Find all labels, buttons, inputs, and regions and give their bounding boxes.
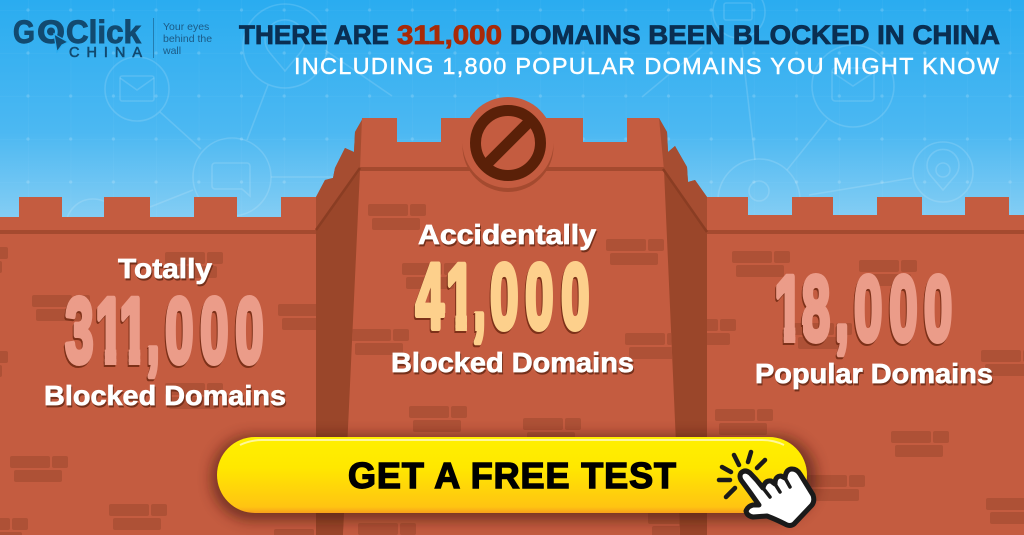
stat: popular domains: [756, 273, 994, 392]
stat: accidentally blocked: Accidentally: [418, 219, 596, 250]
network icons in the sky: [66, 0, 973, 253]
title: THERE ARE: [239, 20, 389, 50]
icon: clicking hand: [719, 452, 814, 526]
stat: popular domains: 18,000: [774, 257, 952, 360]
logo: O: [37, 14, 65, 50]
stat: total blocked: [44, 253, 286, 411]
logo: wall: [162, 45, 181, 57]
tower side faces: [316, 118, 707, 535]
stat: total blocked: Blocked Domains: [44, 380, 286, 411]
stat: total blocked: 311,000: [65, 279, 264, 382]
logo: CHINA: [69, 45, 142, 61]
logo: behind the: [163, 33, 212, 45]
tower bricks: [351, 204, 706, 535]
stop sign: [462, 97, 554, 192]
stat: accidentally blocked: Blocked Domains: [391, 347, 634, 378]
right wall: [700, 197, 1024, 535]
title: [239, 20, 1000, 50]
stat: popular domains: Popular Domains: [755, 358, 993, 389]
left wall: [0, 197, 330, 535]
wall bricks: [0, 247, 1024, 535]
logo: Your eyes: [163, 21, 209, 33]
call to action button: GET A FREE TEST: [348, 455, 676, 496]
logo: G: [13, 14, 35, 50]
title: 311,000: [397, 20, 502, 50]
subtitle: INCLUDING 1,800 POPULAR DOMAINS YOU MIGHT KNOW: [294, 53, 1000, 79]
stat: accidentally blocked: 41,000: [416, 245, 589, 348]
title: DOMAINS BEEN BLOCKED IN CHINA: [510, 20, 1000, 50]
sky background: [0, 0, 1024, 240]
call to action button: [212, 436, 816, 520]
stat: total blocked: Totally: [118, 253, 212, 284]
logo: Click: [66, 14, 141, 50]
logo: [13, 14, 212, 61]
stat: accidentally blocked: [391, 219, 634, 378]
tower front: [316, 118, 707, 535]
